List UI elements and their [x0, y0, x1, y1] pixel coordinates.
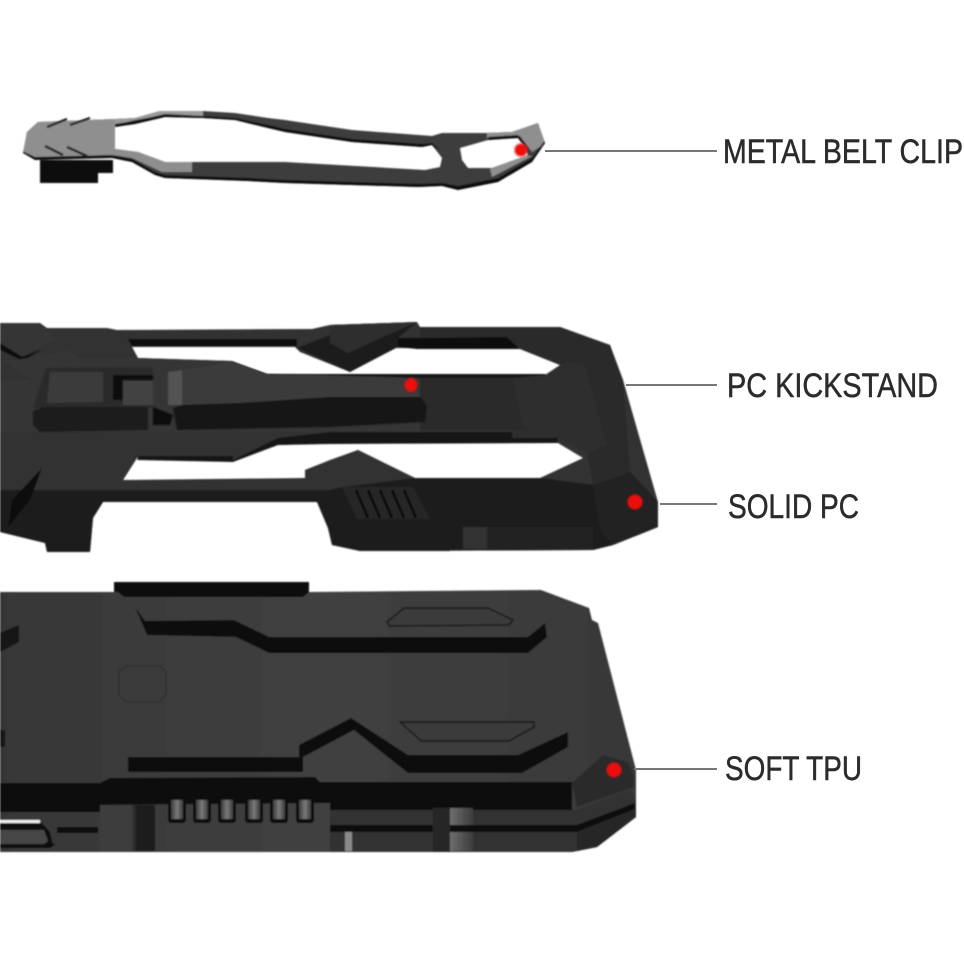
- lower strip: [463, 527, 593, 549]
- marker dot: [628, 494, 642, 510]
- upper right bump: [297, 322, 417, 372]
- lower band highlights: [433, 808, 450, 852]
- kickstand arm front: [173, 397, 427, 430]
- charging port: [0, 823, 55, 848]
- marker dot: [606, 762, 622, 778]
- clip mounting block: [40, 160, 113, 183]
- lower raised step: [128, 718, 568, 773]
- panel: TPU case: [0, 582, 636, 852]
- frame right rim: [420, 327, 630, 485]
- case band lines: [330, 803, 635, 832]
- callout: solid PC: [628, 488, 859, 526]
- camera square: [119, 666, 166, 702]
- leader line: [634, 768, 717, 770]
- clip grip slashes: [45, 118, 90, 156]
- leader line: [660, 503, 717, 505]
- frame body: [0, 322, 658, 552]
- kickstand hinge: [168, 370, 182, 405]
- upper hexagon outline: [387, 608, 513, 626]
- kickstand base block: [33, 367, 153, 408]
- upper left bump: [0, 323, 57, 356]
- port slot: [57, 827, 98, 833]
- lower center bump: [305, 450, 415, 490]
- clip metal highlights: [22, 110, 546, 191]
- clip shadow edges: [22, 140, 546, 191]
- lower hexagon outline: [400, 722, 534, 741]
- case front black band: [0, 777, 572, 812]
- grille vents: [342, 487, 430, 519]
- frame lower rail: [137, 432, 558, 462]
- case corner facet: [572, 755, 634, 807]
- leader line: [626, 384, 717, 386]
- kickstand arm top: [182, 362, 421, 405]
- lower left bump: [0, 448, 137, 490]
- label: SOLID PC: [728, 488, 859, 526]
- panel: PC frame: [0, 322, 658, 552]
- frame corner facet: [593, 472, 658, 545]
- case lower strip right: [330, 790, 636, 852]
- case top face: [0, 590, 636, 852]
- clip body: [23, 111, 545, 190]
- kickstand slot: [113, 375, 153, 400]
- kickstand top face: [47, 372, 103, 403]
- case rear tab: [114, 582, 309, 600]
- grille lower block: [358, 522, 450, 551]
- upper raised step: [135, 607, 547, 653]
- callout: metal belt clip: [514, 133, 963, 171]
- kickstand gap shadow: [153, 407, 173, 425]
- marker dot: [404, 378, 418, 392]
- callout: soft TPU: [606, 750, 862, 788]
- vertical port shadow: [100, 805, 155, 851]
- frame front band: [0, 472, 658, 552]
- frame right U panel: [512, 362, 607, 453]
- panel: PC kickstand arm: [33, 362, 427, 432]
- kickstand base front: [33, 407, 148, 432]
- marker dot: [514, 144, 528, 156]
- label: SOFT TPU: [725, 750, 862, 788]
- leader line: [545, 150, 717, 152]
- callout: PC kickstand: [404, 367, 938, 405]
- buttons: [168, 797, 314, 823]
- kickstand recessed panel: [0, 378, 524, 432]
- left edge cutouts: [0, 625, 19, 747]
- frame top inner lips: [128, 337, 520, 349]
- panel: metal belt clip: [22, 110, 546, 192]
